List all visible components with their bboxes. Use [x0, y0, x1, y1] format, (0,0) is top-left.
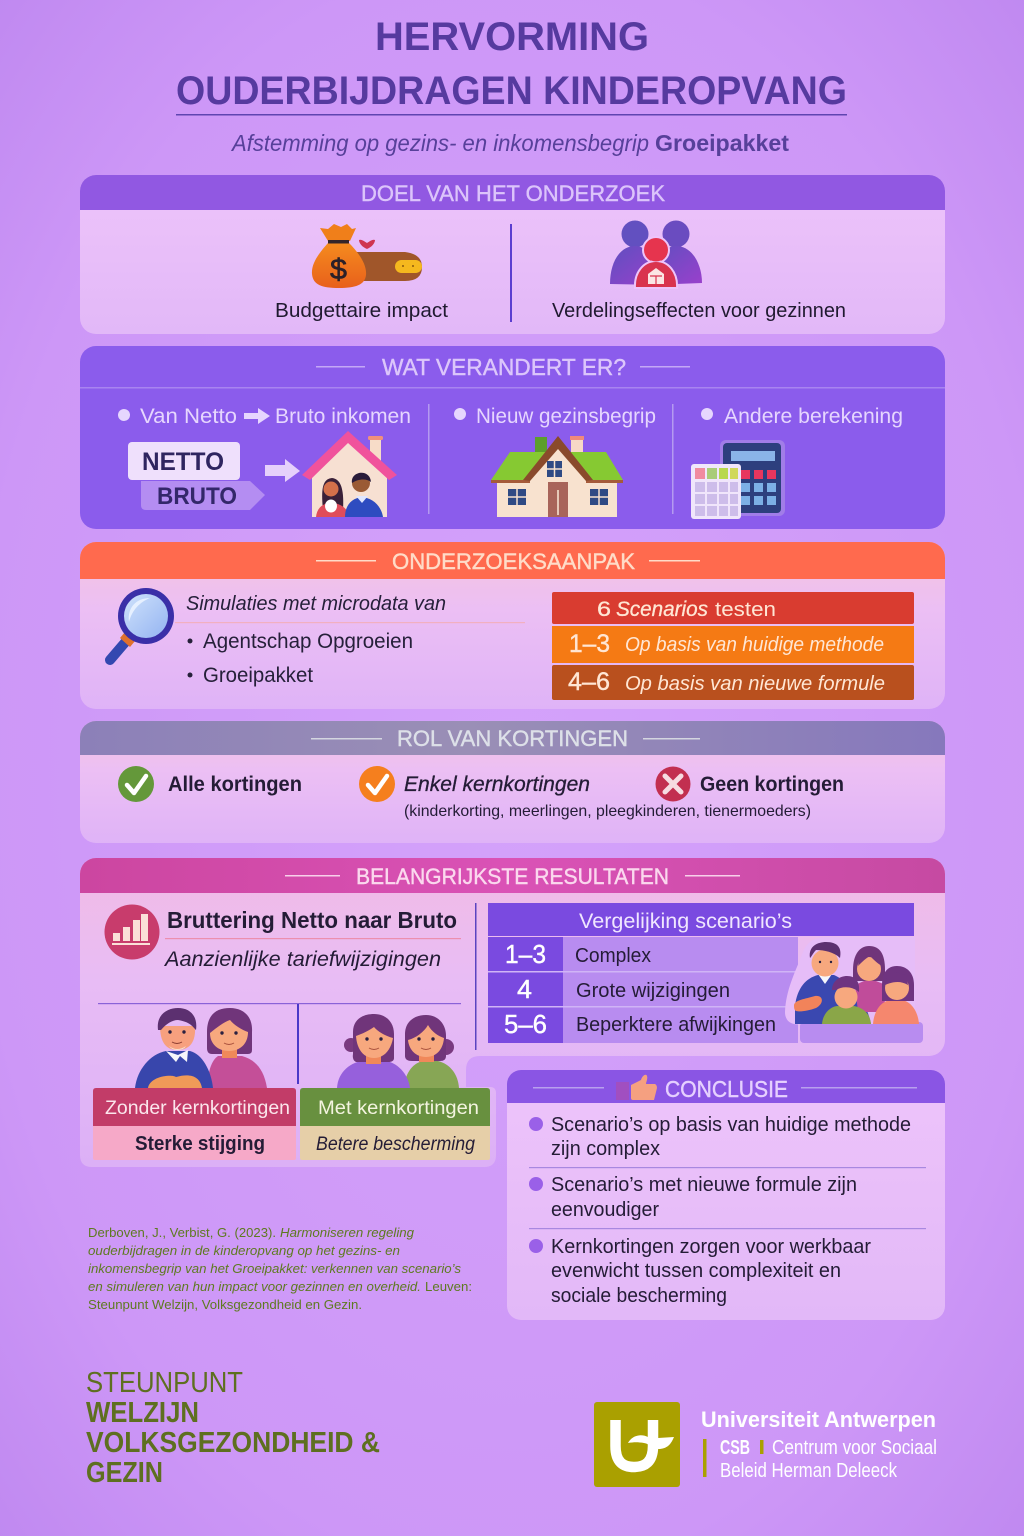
- conclusion item 2: eenvoudiger: [551, 1199, 659, 1221]
- icon: family silhouettes: [610, 220, 702, 288]
- logo: universiteit antwerpen: Universiteit Antwerpen: [701, 1407, 936, 1432]
- logo: steunpunt: GEZIN: [86, 1457, 163, 1489]
- citation: Harmoniseren regeling: [280, 1225, 415, 1240]
- conclusion item 1: zijn complex: [551, 1138, 660, 1160]
- logo: universiteit antwerpen: Centrum voor Sociaal: [772, 1437, 937, 1459]
- item: geen kortingen: Geen kortingen: [700, 773, 844, 796]
- panel: rol van kortingen: [80, 721, 945, 843]
- list: data sources: Agentschap Opgroeien: [203, 630, 413, 653]
- panel: doel van het onderzoek: [80, 175, 945, 334]
- subtitle: Afstemming op gezins- en inkomensbegrip: [230, 130, 649, 156]
- heading: onderzoeksaanpak: ONDERZOEKSAANPAK: [392, 549, 635, 574]
- citation: Leuven:: [425, 1279, 472, 1294]
- citation: Steunpunt Welzijn, Volksgezondheid en Gezin.: [88, 1297, 362, 1312]
- table: scenarios: 4–6: [568, 668, 610, 696]
- item: van netto naar bruto: [118, 405, 411, 428]
- card: zonder kernkortingen: Zonder kernkortingen: [105, 1098, 290, 1119]
- item: enkel kernkortingen: [359, 766, 811, 820]
- item: geen kortingen: [656, 766, 844, 802]
- label: budgettaire impact: Budgettaire impact: [275, 300, 448, 322]
- citation: Derboven, J., Verbist, G. (2023).: [88, 1225, 276, 1240]
- item: enkel kernkortingen: Enkel kernkortingen: [404, 773, 590, 796]
- table: vergelijking scenario's: Grote wijzigingen: [576, 980, 730, 1002]
- table: vergelijking scenario's: Vergelijking scenario’s: [579, 910, 792, 933]
- conclusion item 2: [529, 1174, 857, 1221]
- icon: netto bruto tags: NETTO: [142, 448, 224, 476]
- panel: conclusie: [507, 1070, 945, 1320]
- citation: [88, 1225, 472, 1312]
- heading: wat verandert er: WAT VERANDERT ER?: [382, 354, 626, 380]
- heading: doel van het onderzoek: DOEL VAN HET ONDERZOEK: [361, 181, 665, 206]
- heading: rol van kortingen: ROL VAN KORTINGEN: [397, 726, 628, 751]
- table: scenarios: [552, 592, 914, 700]
- table: vergelijking scenario's: Complex: [575, 945, 651, 967]
- list: data sources: [188, 630, 413, 687]
- card: met kernkortingen: [300, 1088, 490, 1160]
- logo: universiteit antwerpen: CSB: [720, 1437, 750, 1459]
- icon: calculator and spreadsheet: [691, 440, 785, 519]
- icon: money bag and wallet: $: [330, 254, 347, 286]
- icon: magnifying glass: [110, 588, 174, 660]
- text: simulaties met microdata: Simulaties met microdata van: [186, 593, 446, 615]
- conclusion item 1: Scenario’s op basis van huidige methode: [551, 1114, 911, 1136]
- conclusion item 1: [529, 1114, 911, 1160]
- heading: belangrijkste resultaten: BELANGRIJKSTE RESULTATEN: [356, 864, 669, 889]
- icon: money bag and wallet: [312, 224, 422, 288]
- logo: steunpunt: WELZIJN: [86, 1397, 199, 1429]
- table: scenarios: 6: [597, 598, 611, 621]
- item: van netto naar bruto: Van Netto: [140, 405, 237, 428]
- item: andere berekening: Andere berekening: [724, 405, 903, 428]
- list: data sources: Groeipakket: [203, 664, 313, 687]
- item: alle kortingen: [118, 766, 302, 802]
- icon: green house: [491, 436, 623, 517]
- logo: steunpunt: VOLKSGEZONDHEID &: [86, 1427, 380, 1459]
- panel: belangrijkste resultaten: [80, 858, 945, 1167]
- conclusion item 3: sociale bescherming: [551, 1285, 727, 1307]
- panel: wat verandert er: [80, 346, 945, 529]
- table: vergelijking scenario's: [488, 903, 923, 1043]
- illustration: couple without core discounts: [135, 1008, 267, 1088]
- illustration: family of four: [785, 937, 919, 1024]
- item: enkel kernkortingen: (kinderkorting, meerlingen, pleegkinderen, tienermoeders): [404, 803, 811, 820]
- table: scenarios: 1–3: [569, 630, 610, 658]
- item: alle kortingen: Alle kortingen: [168, 773, 302, 796]
- text: tariefwijzigingen: Aanzienlijke tariefwijzigingen: [163, 948, 441, 971]
- conclusion item 3: Kernkortingen zorgen voor werkbaar: [551, 1236, 871, 1258]
- table: scenarios: Op basis van nieuwe formule: [625, 673, 885, 695]
- icon: house with couple: [302, 431, 397, 517]
- title: HERVORMING: [375, 15, 649, 59]
- conclusion item 3: [529, 1236, 871, 1307]
- table: vergelijking scenario's: 5–6: [504, 1009, 547, 1039]
- text: bruttering: Bruttering Netto naar Bruto: [167, 907, 457, 933]
- table: scenarios: Op basis van huidige methode: [625, 634, 884, 656]
- logo: steunpunt: STEUNPUNT: [86, 1367, 243, 1399]
- conclusion item 2: Scenario’s met nieuwe formule zijn: [551, 1174, 857, 1196]
- table: vergelijking scenario's: Beperktere afwijkingen: [576, 1014, 776, 1036]
- table: scenarios: testen: [715, 599, 776, 621]
- conclusion item 3: evenwicht tussen complexiteit en: [551, 1260, 841, 1282]
- citation: ouderbijdragen in de kinderopvang op het gezins- en: [88, 1243, 400, 1258]
- logo: steunpunt: [86, 1367, 380, 1489]
- card: met kernkortingen: Betere bescherming: [316, 1134, 475, 1155]
- heading: conclusie: CONCLUSIE: [665, 1076, 788, 1102]
- subtitle: Groeipakket: [655, 130, 789, 156]
- item: van netto naar bruto: Bruto inkomen: [275, 405, 411, 428]
- icon: thumbs up: [616, 1075, 657, 1100]
- item: nieuw gezinsbegrip: Nieuw gezinsbegrip: [476, 405, 656, 428]
- citation: inkomensbegrip van het Groeipakket: verkennen van scenario’s: [88, 1261, 462, 1276]
- label: verdelingseffecten: Verdelingseffecten voor gezinnen: [552, 300, 846, 322]
- card: zonder kernkortingen: Sterke stijging: [135, 1133, 265, 1155]
- table: vergelijking scenario's: 1–3: [505, 939, 546, 969]
- logo: universiteit antwerpen: Beleid Herman Deleeck: [720, 1460, 898, 1482]
- panel: onderzoeksaanpak: [80, 542, 945, 709]
- table: vergelijking scenario's: 4: [517, 974, 532, 1004]
- card: zonder kernkortingen: [93, 1088, 296, 1160]
- icon: bar chart badge: [104, 904, 160, 960]
- card: met kernkortingen: Met kernkortingen: [318, 1098, 479, 1119]
- table: scenarios: Scenarios: [616, 598, 708, 621]
- title: OUDERBIJDRAGEN KINDEROPVANG: [176, 69, 847, 113]
- citation: en simuleren van hun impact voor gezinnen en overheid.: [88, 1279, 421, 1294]
- divider: [510, 224, 512, 322]
- icon: netto bruto tags: [128, 442, 300, 510]
- logo: universiteit antwerpen: [594, 1402, 937, 1487]
- illustration: couple with core discounts: [337, 1014, 459, 1088]
- icon: netto bruto tags: BRUTO: [157, 483, 237, 510]
- title: [176, 15, 847, 116]
